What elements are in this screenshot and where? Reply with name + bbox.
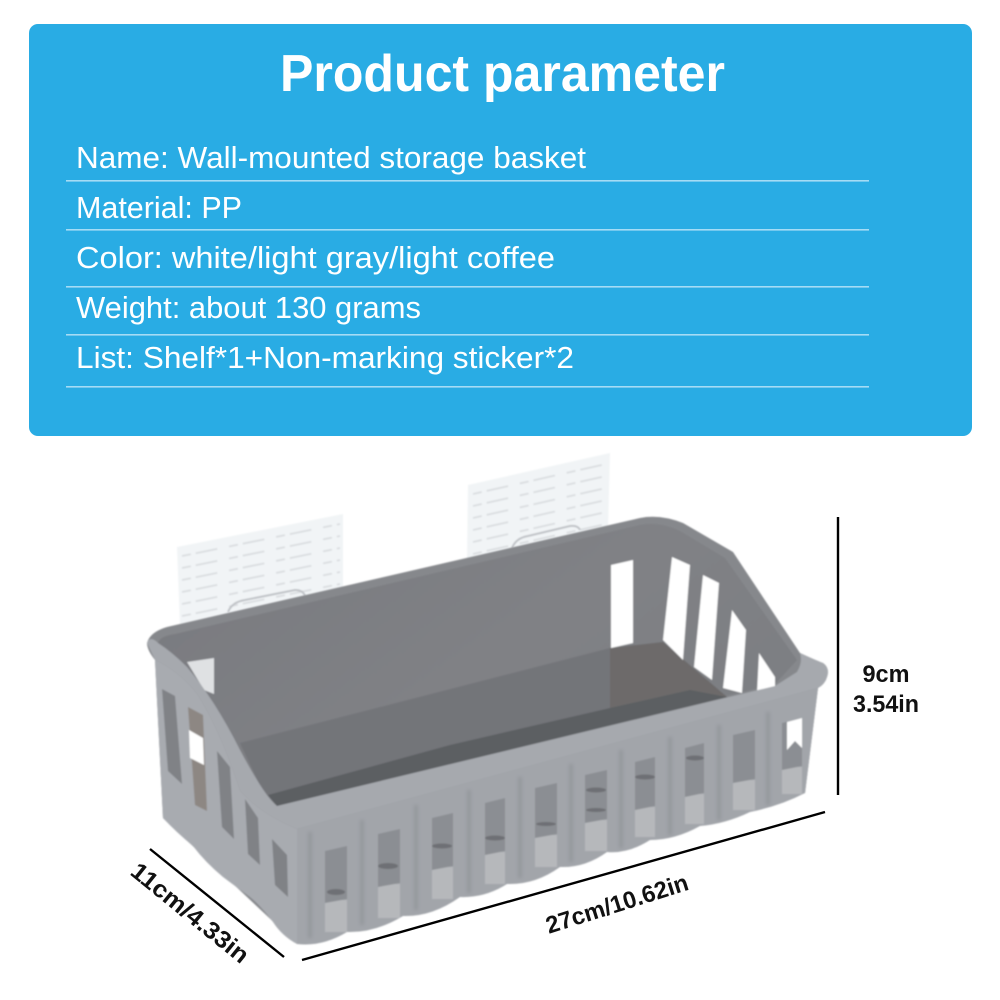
front wall slat shading	[310, 712, 768, 938]
spec: name: Name: Wall-mounted storage basket	[76, 140, 586, 175]
dimension: depth: 11cm/4.33in	[125, 858, 254, 969]
spec: material: Material: PP	[76, 190, 242, 225]
left sticker seen through the side	[187, 658, 214, 694]
front and side rim	[147, 639, 828, 829]
basket silhouette and rim	[147, 517, 828, 944]
spec: weight: Weight: about 130 grams	[76, 290, 421, 325]
side wall windows	[162, 689, 288, 897]
side wall second window	[188, 707, 207, 811]
basket	[147, 517, 828, 944]
left adhesive sticker	[177, 514, 343, 625]
side wall	[155, 660, 297, 944]
white gap in last front window	[787, 718, 802, 750]
title: Product parameter	[280, 45, 725, 103]
front wall windows	[325, 718, 802, 903]
spec: list: List: Shelf*1+Non-marking sticker*2	[76, 340, 574, 375]
front wall	[297, 688, 818, 944]
right wall openings	[611, 557, 775, 693]
dark floor strip	[268, 690, 727, 806]
right adhesive sticker	[467, 453, 610, 560]
dimension: height: 3.54in	[853, 691, 919, 718]
front wall light tabs	[325, 767, 802, 932]
basket floor	[240, 642, 727, 806]
dimension: height	[838, 517, 919, 795]
translucent floor at right	[610, 642, 727, 712]
basket interior back wall	[158, 524, 797, 806]
panel: product parameters	[29, 24, 972, 436]
dimension: height: 9cm	[862, 661, 910, 688]
dark marks through windows	[327, 756, 704, 895]
dimension: depth	[125, 849, 284, 969]
dimension: width	[302, 812, 825, 960]
dimension: width: 27cm/10.62in	[543, 869, 692, 940]
spec: color: Color: white/light gray/light coffee	[76, 240, 555, 275]
